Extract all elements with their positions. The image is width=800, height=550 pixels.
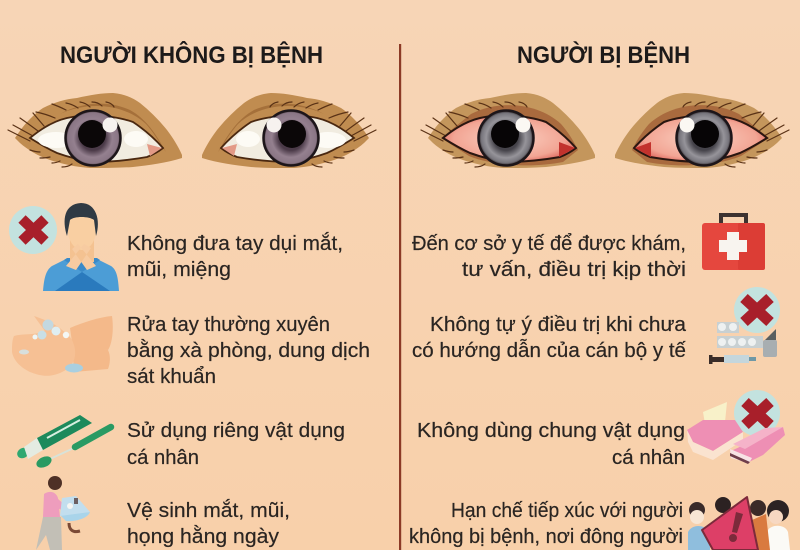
icon: healthy eye left xyxy=(8,93,182,168)
icon: red eye left xyxy=(421,93,595,168)
icon: first aid kit xyxy=(702,215,765,270)
text: do not touch face: mũi, miệng xyxy=(127,258,231,281)
text: limit contact: không bị bệnh, nơi đông người xyxy=(409,525,683,548)
text: do not share items: cá nhân xyxy=(612,446,685,469)
icon: tissues and towels with cross xyxy=(687,390,785,464)
text: no self treatment: có hướng dẫn của cán bộ y tế xyxy=(412,339,687,362)
icon: toothpaste and toothbrush xyxy=(15,415,111,470)
text: limit contact: Hạn chế tiếp xúc với người xyxy=(451,499,683,522)
center divider xyxy=(399,44,401,550)
text: wash hands: bằng xà phòng, dung dịch xyxy=(127,339,370,362)
icon: washing hands xyxy=(12,316,113,376)
text: personal items: Sử dụng riêng vật dụng xyxy=(127,419,345,442)
text: no self treatment xyxy=(412,313,687,362)
text: do not touch face: Không đưa tay dụi mắt, xyxy=(127,232,343,255)
text: wash hands: Rửa tay thường xuyên xyxy=(127,313,330,336)
heading: người không bị bệnh: NGƯỜI KHÔNG BỊ BỆNH xyxy=(60,41,323,69)
icon: pills and syringe with cross xyxy=(709,287,780,364)
icon: person washing at sink xyxy=(36,476,90,550)
icon: healthy eye right xyxy=(202,93,376,168)
heading: người bị bệnh: NGƯỜI BỊ BỆNH xyxy=(517,41,690,69)
text: hygiene: họng hằng ngày xyxy=(127,525,280,548)
text: personal items: cá nhân xyxy=(127,446,199,469)
icon: warning triangle with crowd xyxy=(688,497,790,550)
icon: man touching face with cross xyxy=(9,203,119,291)
text: do not share items: Không dùng chung vật dụng xyxy=(417,419,685,442)
text: do not touch face xyxy=(127,232,343,281)
icon: red eye right xyxy=(615,93,789,168)
text: no self treatment: Không tự ý điều trị khi chưa xyxy=(430,313,687,336)
text: visit medical facility xyxy=(412,232,686,281)
text: wash hands: sát khuẩn xyxy=(127,365,216,388)
text: hygiene: Vệ sinh mắt, mũi, xyxy=(127,499,290,522)
text: personal items xyxy=(127,419,345,469)
text: visit medical facility: tư vấn, điều trị kịp thời xyxy=(462,258,686,281)
text: do not share items xyxy=(417,419,685,469)
text: limit contact xyxy=(409,499,683,548)
text: hygiene xyxy=(127,499,290,548)
text: visit medical facility: Đến cơ sở y tế để được khám, xyxy=(412,232,686,255)
text: wash hands xyxy=(127,313,370,388)
